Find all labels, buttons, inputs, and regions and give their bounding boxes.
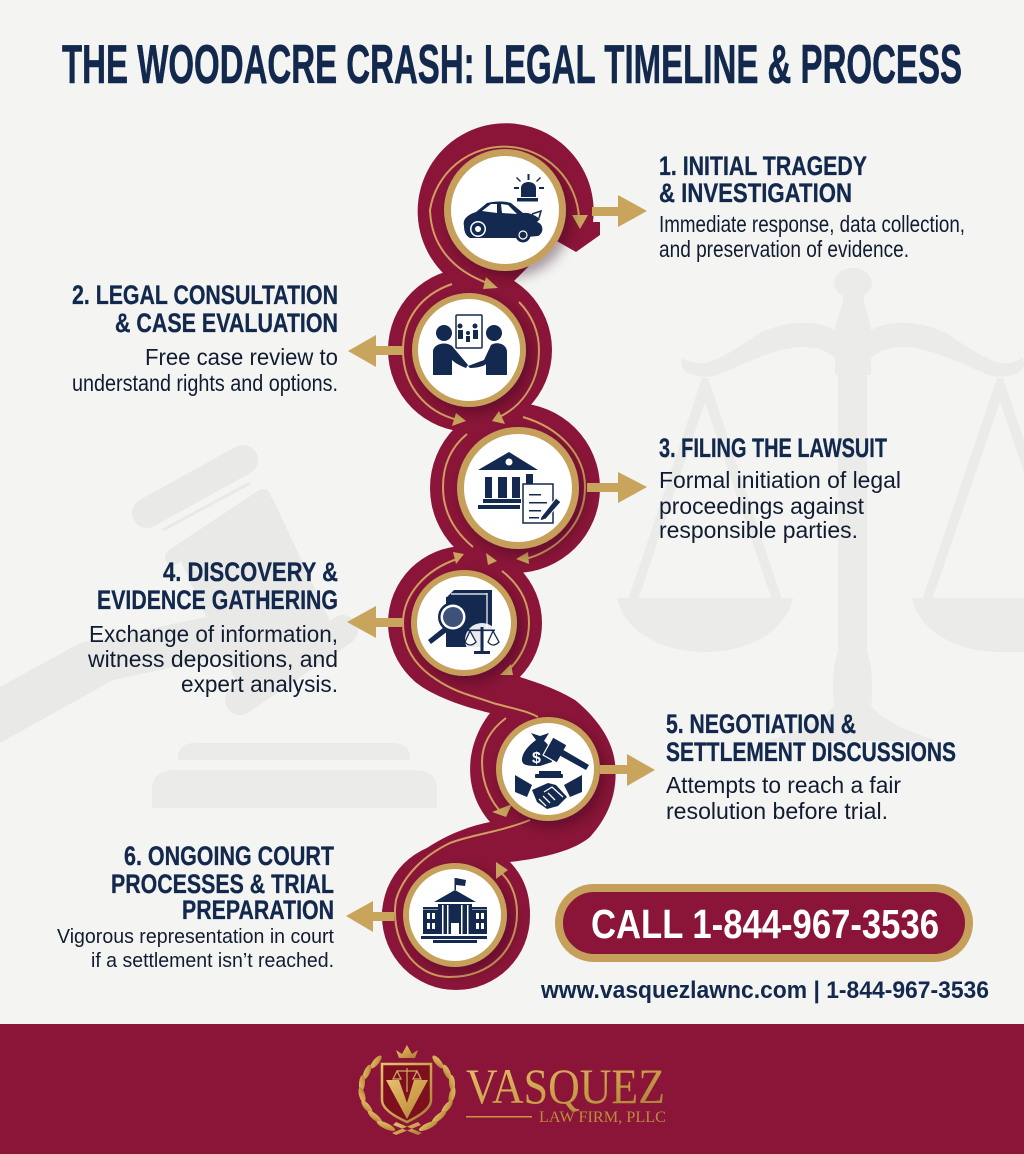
text block: step 3 — [659, 433, 901, 543]
text block: step 3: proceedings against — [659, 493, 865, 519]
text block: step 1 — [659, 151, 965, 262]
text block: step 5: 5. NEGOTIATION & — [666, 709, 856, 739]
arrow: step 1 — [592, 195, 647, 227]
text block: step 4: 4. DISCOVERY & — [163, 557, 338, 587]
text block: step 3: responsible parties. — [659, 517, 858, 543]
text block: step 6: Vigorous representation in court — [57, 926, 334, 948]
text block: step 1: 1. INITIAL TRAGEDY — [659, 151, 867, 181]
arrow: step 2 — [348, 335, 403, 367]
flow arrowheads — [452, 215, 588, 879]
text block: step 2: Free case review to — [145, 344, 338, 370]
gold flow lines — [395, 147, 585, 977]
icon: crashed car and siren — [464, 174, 544, 242]
icon: money bag, gavel and handshake — [515, 733, 589, 809]
icon: handshake and family document — [433, 315, 507, 375]
watermark: gavel — [0, 460, 437, 808]
text block: step 2: 2. LEGAL CONSULTATION — [72, 280, 338, 310]
text block: step 6: if a settlement isn’t reached. — [91, 950, 334, 972]
step 4 badge — [411, 570, 517, 676]
text block: step 6: 6. ONGOING COURT — [124, 841, 334, 871]
text block: step 6: PROCESSES & TRIAL — [111, 869, 334, 899]
step 1 badge — [444, 149, 566, 271]
icon: folder, magnifier and scales — [428, 590, 499, 657]
arrow: step 4 — [347, 606, 403, 638]
text block: step 5: resolution before trial. — [666, 798, 888, 824]
logo crown — [396, 1045, 418, 1058]
icon: money bag, gavel and handshake: $ — [532, 750, 541, 767]
arrow: step 6 — [346, 901, 394, 932]
text block: step 3: 3. FILING THE LAWSUIT — [659, 433, 887, 463]
text block: step 2: & CASE EVALUATION — [115, 308, 338, 338]
logo subtitle: LAW FIRM, PLLC — [539, 1109, 666, 1126]
watermark: scales of justice — [617, 268, 1024, 741]
website and phone: www.vasquezlawnc.com | 1-844-967-3536 — [540, 977, 989, 1004]
step 3 badge — [457, 427, 579, 549]
step 5 badge — [496, 717, 600, 821]
text block: step 4: EVIDENCE GATHERING — [97, 585, 338, 615]
ribbon body — [382, 123, 616, 990]
text block: step 3: Formal initiation of legal — [659, 467, 901, 493]
text block: step 1: and preservation of evidence. — [659, 236, 909, 262]
text block: step 5: Attempts to reach a fair — [666, 772, 901, 798]
logo laurel wreath — [357, 1054, 457, 1135]
text block: step 4: witness depositions, and — [87, 646, 338, 672]
text block: step 6: PREPARATION — [182, 895, 334, 925]
logo scales — [393, 1068, 421, 1092]
text block: step 6 — [57, 841, 334, 972]
text block: step 4: expert analysis. — [181, 671, 338, 697]
text block: step 5 — [666, 709, 956, 824]
logo: Vasquez Law Firm — [357, 1045, 666, 1135]
text block: step 1: Immediate response, data collection, — [659, 211, 965, 237]
text block: step 1: & INVESTIGATION — [659, 178, 852, 208]
arrow: step 5 — [600, 754, 655, 786]
call button: CALL 1-844-967-3536 — [591, 901, 939, 947]
arrow: step 3 — [587, 472, 647, 503]
text block: step 4 — [87, 557, 338, 697]
logo wordmark: VASQUEZ — [466, 1058, 665, 1114]
step 6 badge — [403, 863, 507, 967]
text block: step 2: understand rights and options. — [72, 370, 338, 396]
step 2 badge — [412, 293, 526, 407]
footer band — [0, 1024, 1024, 1154]
logo shield — [382, 1064, 431, 1122]
text block: step 4: Exchange of information, — [89, 621, 338, 647]
call button — [559, 888, 969, 958]
icon: court building with flag — [421, 878, 487, 943]
text block: step 2 — [72, 280, 338, 396]
icon: courthouse and document — [478, 452, 561, 523]
timeline ribbon — [382, 123, 616, 990]
logo V monogram — [386, 1080, 428, 1119]
logo rule — [466, 1116, 532, 1118]
